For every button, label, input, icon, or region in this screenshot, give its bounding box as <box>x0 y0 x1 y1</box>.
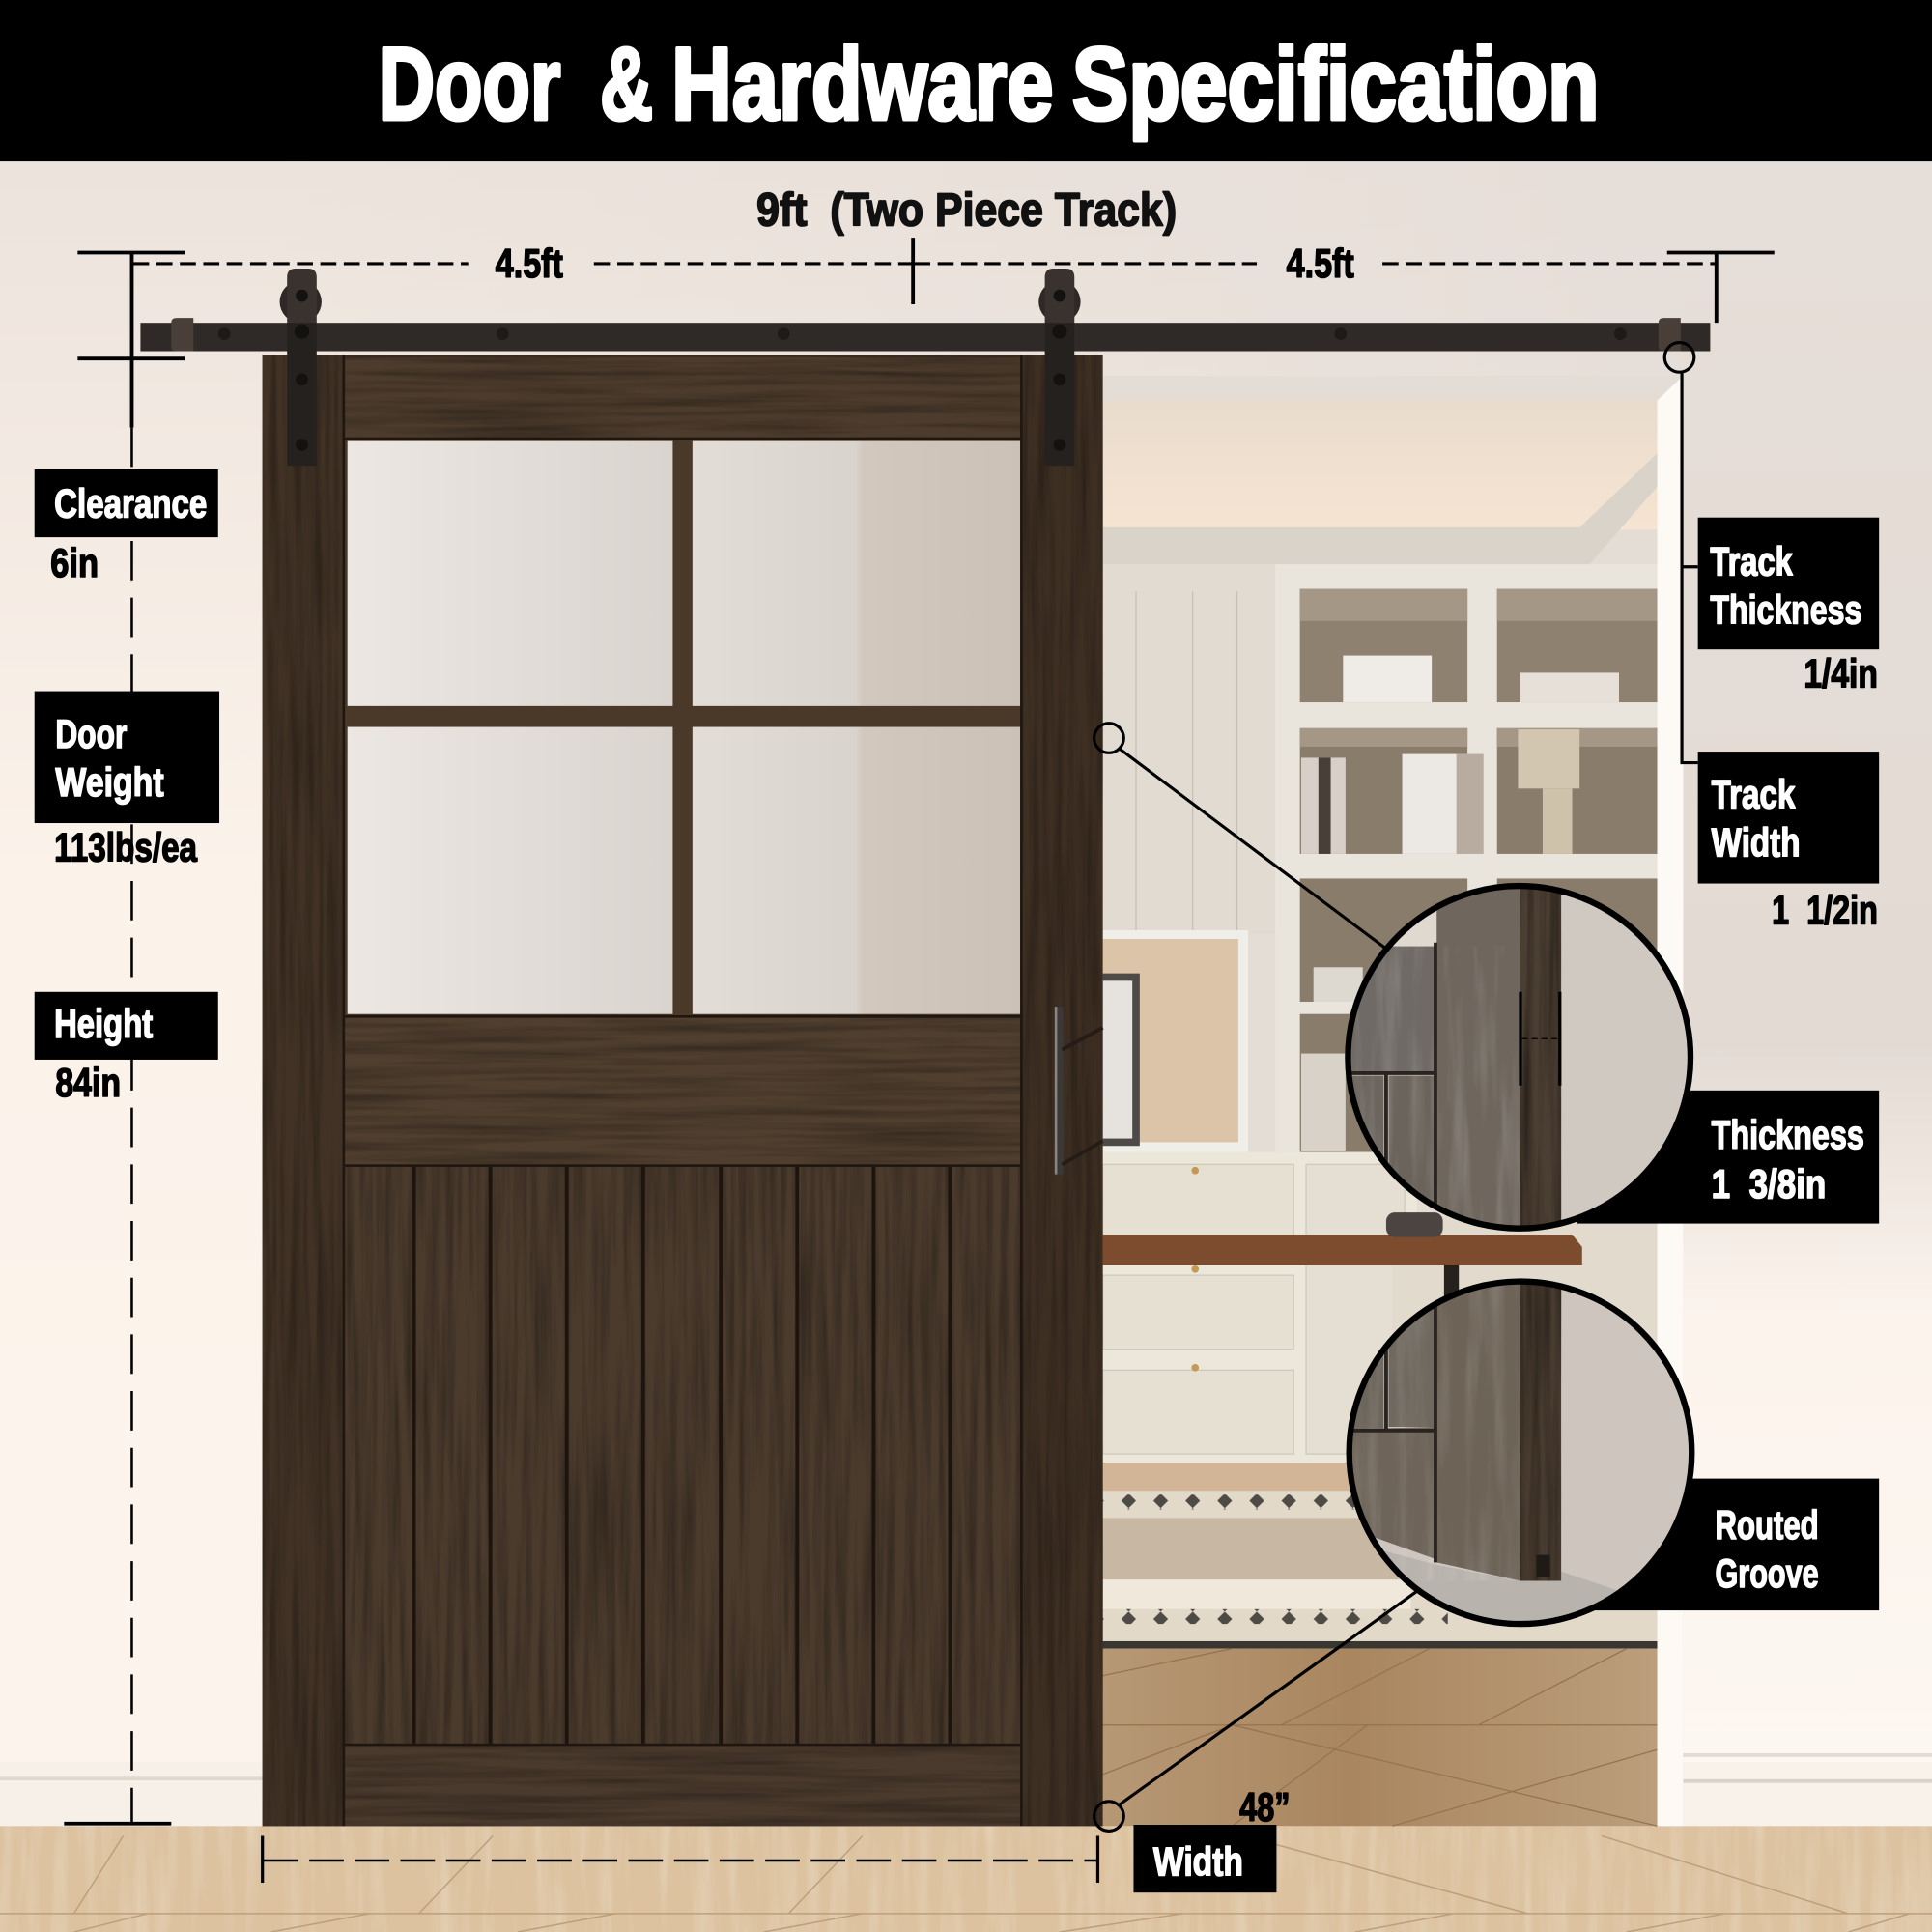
vertical planks <box>344 1167 1020 1744</box>
door weight label <box>35 692 219 870</box>
top rail <box>344 357 1020 438</box>
title: Door <box>379 26 560 142</box>
track thickness label: Track <box>1710 539 1793 584</box>
total length label: 9ft (Two Piece Track) <box>756 184 1177 236</box>
rug and inner floor <box>1103 1463 1658 1826</box>
width label: Width <box>1153 1838 1243 1884</box>
title bar <box>0 0 1932 161</box>
crown moulding <box>1103 453 1658 564</box>
thickness label: 1 3/8in <box>1712 1161 1826 1207</box>
routed groove label: Groove <box>1716 1550 1819 1596</box>
leader line to thickness detail <box>1094 724 1386 949</box>
framed art <box>1103 930 1248 1152</box>
baseboards <box>0 1753 1932 1826</box>
track stops <box>171 318 1681 352</box>
sliding track <box>140 318 1710 352</box>
glass panes <box>344 438 1020 1016</box>
right half label: 4.5ft <box>1287 241 1354 286</box>
track thickness label <box>1698 518 1879 696</box>
height label <box>35 992 218 1105</box>
width value: 48” <box>1239 1784 1290 1830</box>
door weight label: Door <box>55 711 127 756</box>
width label <box>1133 1825 1276 1892</box>
clearance label <box>35 469 218 585</box>
room interior seen through the doorway <box>1103 376 1683 1826</box>
routed groove label: Routed <box>1716 1502 1819 1548</box>
track width label <box>1698 752 1879 933</box>
bottom rail <box>344 1746 1020 1826</box>
magnifier: door edge thickness <box>1343 881 1700 1238</box>
track length dimension <box>77 184 1775 323</box>
panelled wall <box>1103 564 1282 936</box>
door handle <box>1055 1007 1103 1175</box>
door jamb <box>1658 376 1683 1826</box>
clearance label: Clearance <box>54 481 207 526</box>
width dimension <box>263 1784 1290 1892</box>
thickness label: Thickness <box>1712 1112 1864 1157</box>
height label: Height <box>54 1001 153 1046</box>
left half label: 4.5ft <box>496 241 563 286</box>
track thickness label: 1/4in <box>1804 651 1878 696</box>
door slab <box>263 355 1103 1826</box>
track width label: Track <box>1712 772 1796 817</box>
leader line to groove detail <box>1094 1589 1419 1831</box>
track callout connector <box>1664 343 1698 763</box>
floor <box>0 1826 1932 1932</box>
clearance label: 6in <box>50 540 99 585</box>
title: & <box>600 26 653 142</box>
track thickness label: Thickness <box>1710 586 1861 632</box>
desk <box>1103 1212 1582 1296</box>
bookcase <box>1275 564 1658 1155</box>
thickness label <box>1577 1091 1879 1224</box>
title: Specification <box>1072 26 1600 142</box>
title <box>379 26 1600 142</box>
stiles <box>263 355 1103 1826</box>
barn door <box>263 355 1103 1826</box>
track width label: 1 1/2in <box>1772 888 1878 933</box>
right hanger <box>1038 269 1081 466</box>
routed groove label <box>1589 1479 1879 1610</box>
books and objects <box>1301 656 1619 1151</box>
height dimension line <box>64 252 185 1824</box>
height label: 84in <box>55 1060 121 1105</box>
title: Hardware <box>671 26 1054 142</box>
track width label: Width <box>1712 819 1801 865</box>
left hanger <box>280 269 322 466</box>
middle rail <box>344 1016 1020 1164</box>
cabinets <box>1103 1152 1658 1466</box>
track bolts <box>218 327 1627 340</box>
door weight label: Weight <box>55 759 164 805</box>
magnifier: routed groove <box>1343 1275 1700 1633</box>
door weight label: 113lbs/ea <box>54 825 198 870</box>
